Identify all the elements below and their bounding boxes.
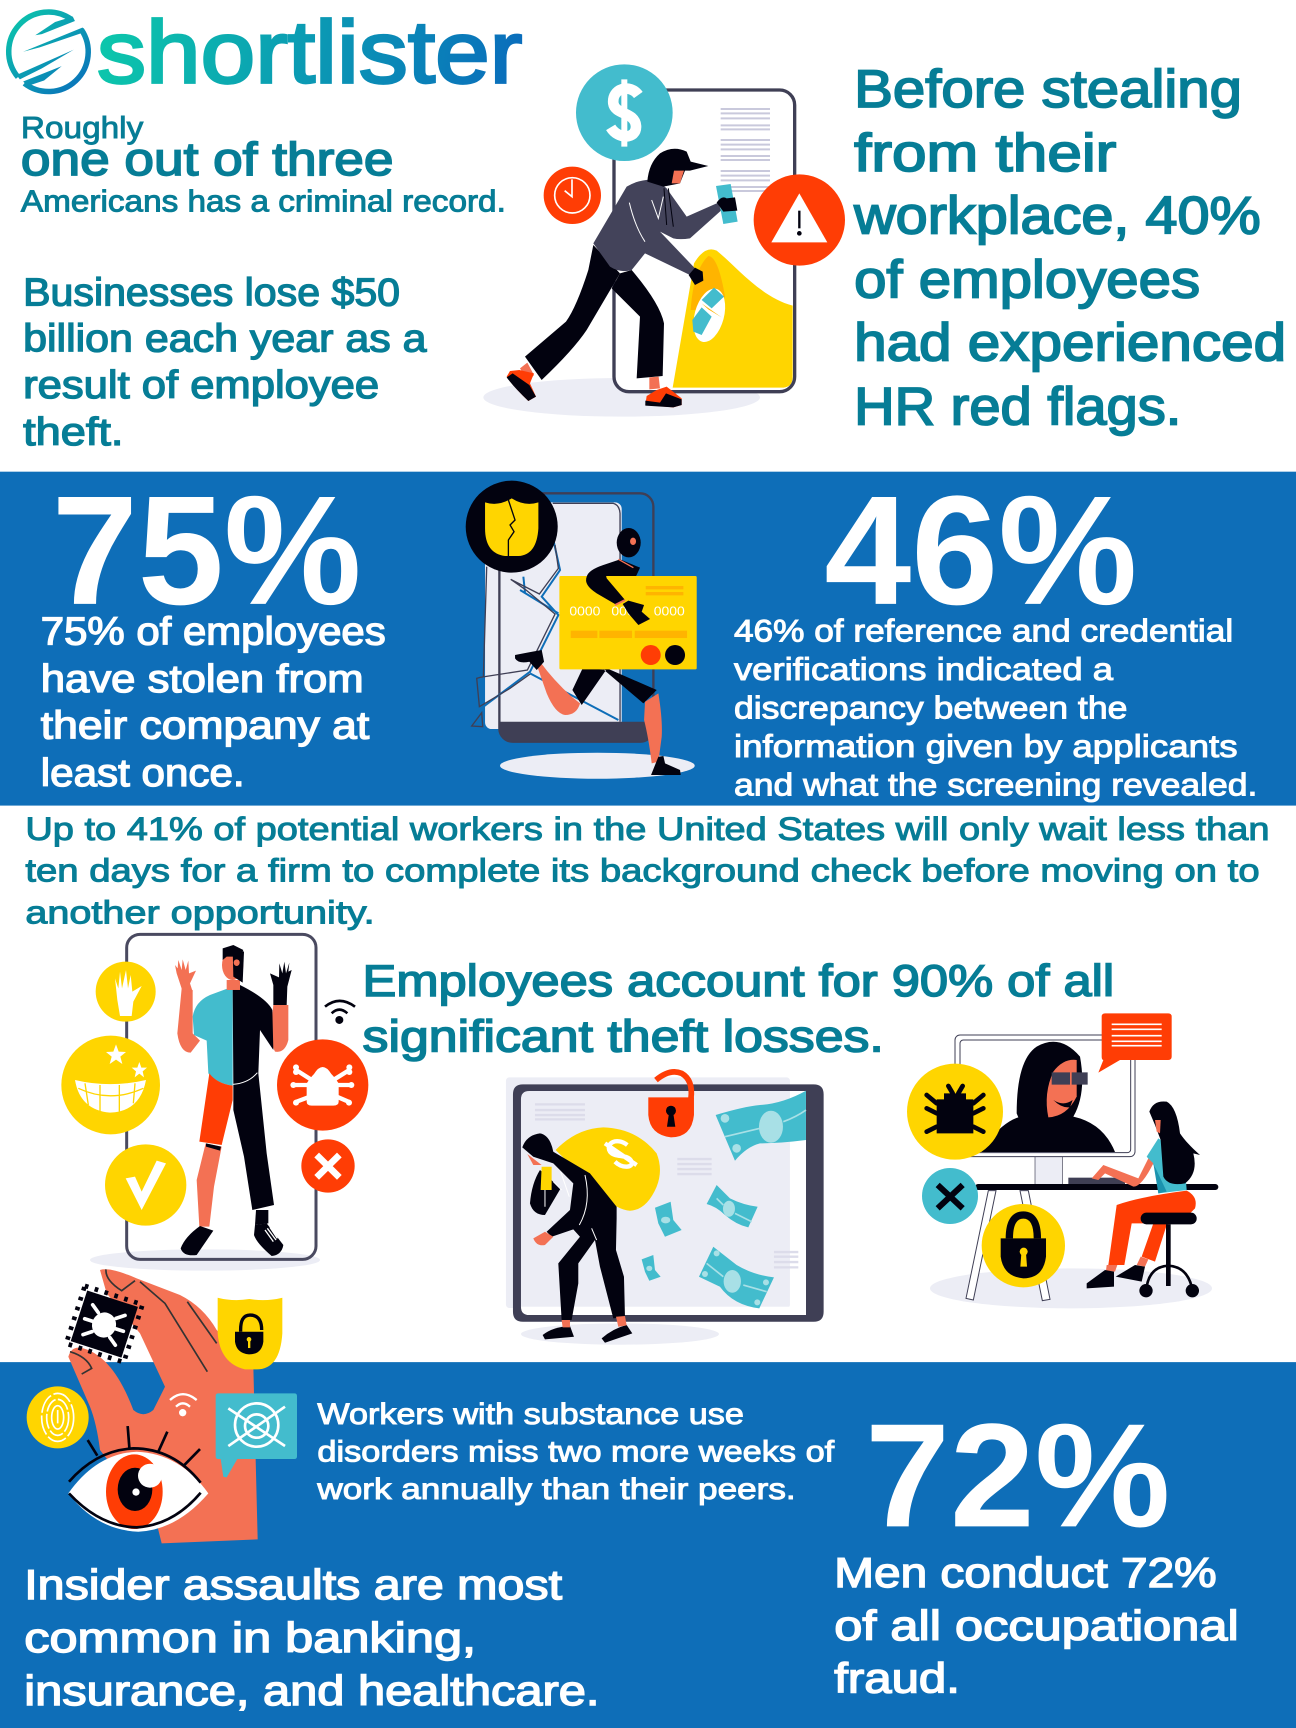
- credit card: 0000: [654, 603, 685, 618]
- text block: 46% of reference checks: discrepancy between the: [734, 691, 1127, 726]
- text block: 46% of reference checks: information given by applicants: [734, 729, 1238, 764]
- icon: speech bubble: [1098, 1013, 1172, 1073]
- text block: men conduct 72%: fraud.: [834, 1655, 960, 1702]
- text block: insider assaults: Insider assaults are most: [24, 1561, 562, 1608]
- text block: 75% of employees: [41, 611, 386, 795]
- icon: hand: [96, 962, 156, 1022]
- icon: yellow lock shield: [218, 1298, 282, 1369]
- illustration: two-faced employee: [61, 934, 368, 1271]
- text block: before stealing: had experienced: [854, 313, 1286, 372]
- icon: bug: [907, 1064, 1003, 1160]
- text block: before stealing: from their: [854, 124, 1116, 183]
- text block: employees account for 90%: significant theft losses.: [363, 1012, 884, 1061]
- text block: before stealing: workplace, 40%: [853, 187, 1261, 246]
- illustration: thief carrying sack: [506, 1072, 824, 1345]
- icon: x badge: [922, 1168, 978, 1224]
- text block: businesses lose $50 billion: [23, 271, 427, 454]
- credit card: [559, 576, 697, 669]
- panel: blue band top: [0, 472, 1296, 806]
- icon: smile with stars: [61, 1036, 160, 1134]
- text block: employees account for 90%: [363, 957, 1114, 1061]
- text block: up to 41% of potential workers: ten days for a firm to complete its background check before moving on to: [25, 853, 1260, 889]
- icon: warning: [754, 174, 845, 266]
- illustration: hacker at computer: [907, 1013, 1218, 1308]
- illustration: credit card thief: [466, 481, 697, 779]
- stat: 72%: 72%: [865, 1393, 1170, 1558]
- icon: fingerprint: [27, 1386, 89, 1448]
- credit card: 0000: [611, 603, 642, 618]
- illustration: hand with chip and eye: [27, 1269, 297, 1543]
- text block: substance use disorders: work annually than their peers.: [316, 1473, 796, 1506]
- panel: blue band bottom: [0, 1362, 1296, 1728]
- text block: 75% of employees: their company at: [41, 704, 370, 747]
- icon: wifi: [170, 1394, 197, 1416]
- text block: before stealing: Before stealing: [854, 60, 1242, 119]
- text block: men conduct 72%: [834, 1549, 1239, 1702]
- text block: insider assaults: [24, 1561, 600, 1714]
- stat: 75%: 75%: [52, 463, 361, 637]
- text block: 46% of reference checks: [734, 613, 1257, 803]
- text block: men conduct 72%: of all occupational: [834, 1602, 1239, 1649]
- text block: one out of three: Roughly: [21, 110, 144, 145]
- icon: cracked shield: [466, 481, 558, 573]
- icon: bug: [277, 1039, 368, 1131]
- logo: shortlister: shortlister: [97, 3, 522, 102]
- icon: open padlock: [648, 1072, 694, 1137]
- text block: 46% of reference checks: verifications indicated a: [734, 652, 1114, 687]
- text block: substance use disorders: disorders miss two more weeks of: [317, 1435, 835, 1468]
- illustration: thief with money bag: [483, 64, 845, 417]
- text block: before stealing: HR red flags.: [854, 377, 1181, 436]
- text block: one out of three: [21, 110, 506, 219]
- text block: men conduct 72%: Men conduct 72%: [834, 1549, 1217, 1596]
- icon: eye: [68, 1426, 208, 1532]
- icon: clock: [544, 167, 601, 224]
- text block: insider assaults: common in banking,: [24, 1614, 476, 1661]
- text block: businesses lose $50 billion: theft.: [23, 411, 123, 454]
- text block: 46% of reference checks: 46% of reference and credential: [734, 613, 1233, 648]
- text block: one out of three: Americans has a criminal record.: [21, 184, 506, 219]
- thief: [522, 1133, 632, 1343]
- text block: 46% of reference checks: and what the screening revealed.: [734, 768, 1257, 803]
- text block: up to 41% of potential workers: [25, 811, 1270, 931]
- credit card: 0000: [569, 603, 600, 618]
- text block: before stealing: [853, 60, 1286, 436]
- icon: dollar coin: [576, 64, 673, 161]
- text block: 75% of employees: have stolen from: [41, 658, 364, 701]
- text block: 75% of employees: 75% of employees: [41, 611, 386, 654]
- text block: one out of three: one out of three: [21, 133, 393, 185]
- icon: wifi: [325, 1001, 355, 1024]
- text block: businesses lose $50 billion: billion each year as a: [23, 318, 427, 361]
- icon: blocked speech bubble: [216, 1393, 297, 1477]
- text block: 75% of employees: least once.: [41, 752, 245, 795]
- icon: red x: [301, 1139, 355, 1193]
- text block: businesses lose $50 billion: result of employee: [23, 364, 379, 407]
- text block: employees account for 90%: Employees account for 90% of all: [363, 957, 1114, 1006]
- icon: check mark: [105, 1144, 186, 1226]
- text block: substance use disorders: Workers with substance use: [317, 1398, 744, 1431]
- text block: before stealing: of employees: [854, 251, 1200, 310]
- icon: padlock: [982, 1204, 1065, 1287]
- text block: up to 41% of potential workers: Up to 41% of potential workers in the United States will only wait less than: [25, 811, 1270, 847]
- banknotes: [642, 1091, 806, 1308]
- icon: chip with bug: [66, 1286, 143, 1362]
- stat: 46%: 46%: [824, 463, 1137, 637]
- text block: up to 41% of potential workers: another opportunity.: [25, 895, 375, 931]
- text block: insider assaults: insurance, and healthcare.: [24, 1667, 600, 1714]
- text block: substance use disorders: [316, 1398, 835, 1506]
- text block: businesses lose $50 billion: Businesses lose $50: [23, 271, 400, 314]
